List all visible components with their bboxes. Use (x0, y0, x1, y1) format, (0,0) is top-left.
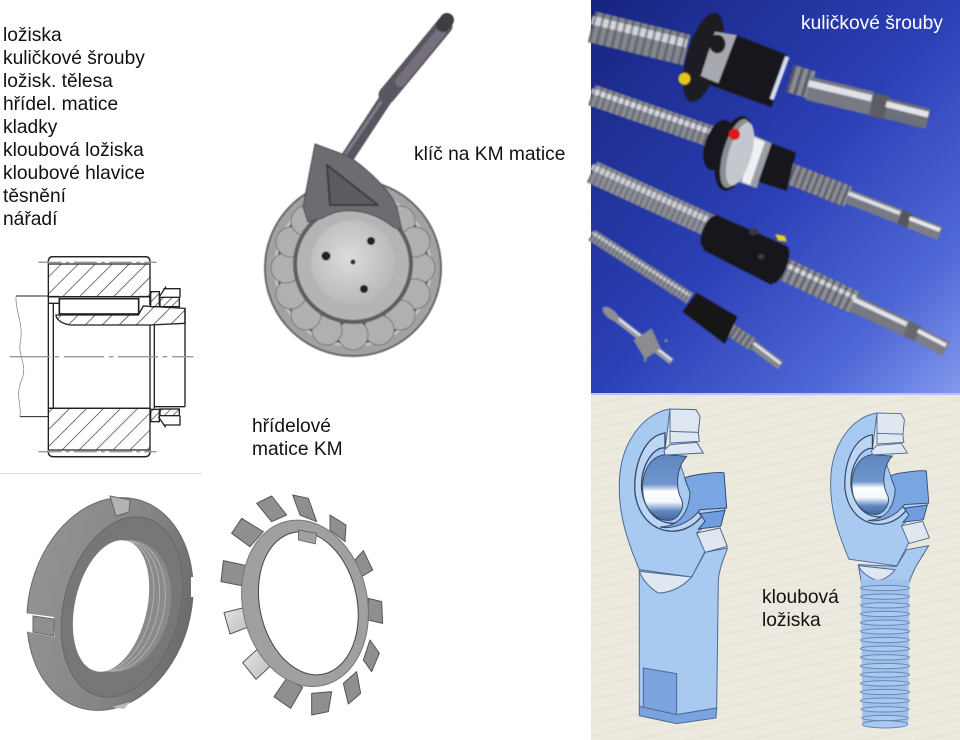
spherical roller bearing (265, 180, 441, 356)
rod end with threaded shank (831, 413, 929, 728)
ball screw 4 (592, 232, 781, 366)
divider line (0, 473, 202, 474)
icon: KM lock nut (4, 479, 216, 729)
drawing: sectional view of adapter sleeve (10, 257, 193, 457)
wrench head (303, 144, 402, 230)
label: rod end bearings: kloubová (762, 587, 839, 608)
panel: ball screws photo (591, 0, 960, 393)
lock nut and washer (151, 287, 180, 427)
text block: topic list: těsnění (3, 186, 67, 207)
text block: topic list: ložisk. tělesa (3, 71, 113, 92)
ball screw 2 (592, 91, 940, 233)
text block: topic list: kloubová ložiska (3, 140, 144, 161)
shaft and sleeve (16, 296, 185, 417)
ball screw 3 (592, 167, 946, 349)
label: KM nut wrench: klíč na KM matice (414, 144, 565, 165)
label: rod end bearings: ložiska (762, 610, 821, 631)
text block: topic list: nářadí (3, 209, 58, 230)
text block: topic list: hřídel. matice (3, 94, 118, 115)
text block: topic list: kloubové hlavice (3, 163, 145, 184)
centre line (10, 355, 193, 359)
photo: KM nut wrench on bearing (265, 20, 447, 356)
bearing section (38, 257, 157, 457)
icon: MB lock washer (221, 495, 383, 715)
wrench handle (343, 20, 447, 158)
panel: rod end bearings (591, 393, 960, 740)
ball screw 1 (592, 9, 928, 119)
text block: topic list: ložiska (3, 25, 62, 46)
label: shaft nuts: matice KM (252, 439, 343, 460)
text block: topic list: kladky (3, 117, 58, 138)
label: ball screws: kuličkové šrouby (801, 13, 943, 34)
label: shaft nuts: hřídelové (252, 416, 331, 437)
text block: topic list: kuličkové šrouby (3, 48, 145, 69)
rod end with female shank (619, 409, 727, 724)
miniature ball screw (600, 304, 672, 362)
